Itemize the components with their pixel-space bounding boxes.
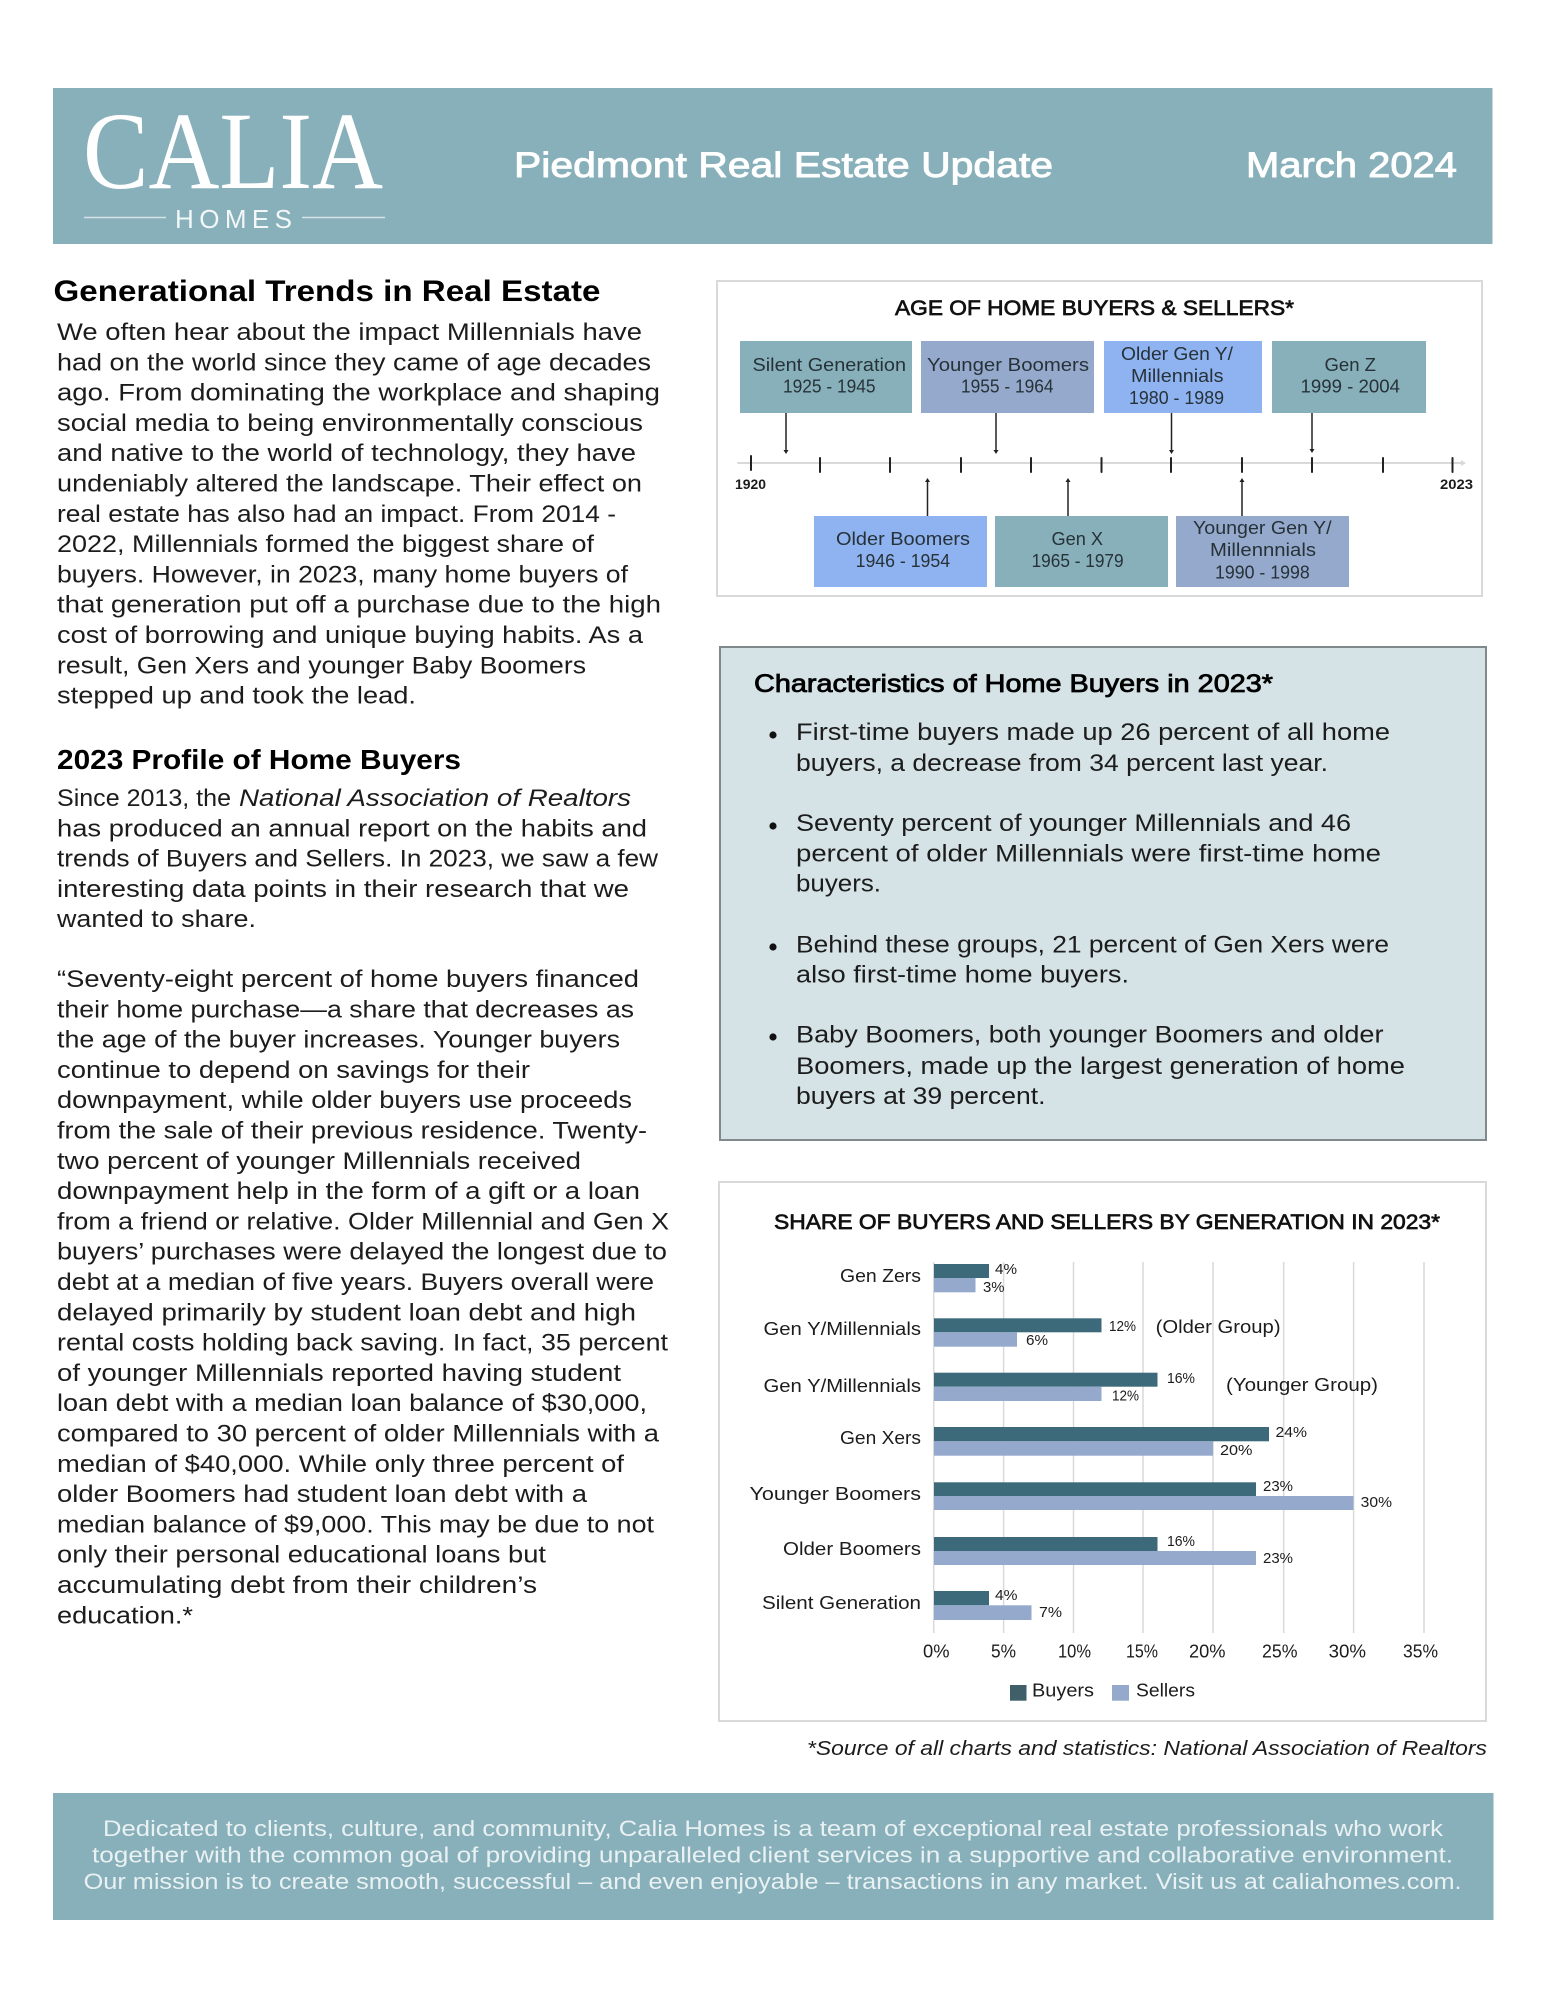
footer mission text — [84, 1816, 1462, 1894]
value labels: 23% — [1263, 1478, 1293, 1495]
x axis labels: 20% — [1189, 1642, 1226, 1662]
buyer bars — [934, 1264, 1269, 1605]
bullet: baby boomers: Baby Boomers, both younger Boomers and older — [796, 1022, 1384, 1049]
timeline title: AGE OF HOME BUYERS & SELLERS* — [895, 297, 1294, 320]
box: Gen Z: Gen Z — [1324, 355, 1376, 375]
logo: Calia Homes: CALIA — [83, 90, 383, 212]
text block: quote: two percent of younger Millennials received — [57, 1148, 581, 1175]
box: Younger Boomers: 1955 - 1964 — [961, 377, 1054, 397]
box: Gen Z: 1999 - 2004 — [1300, 377, 1400, 397]
text block: generational trends: 2022, Millennials formed the biggest share of — [57, 531, 594, 558]
text block: quote: accumulating debt from their children’s — [57, 1572, 537, 1599]
text block: generational trends: We often hear about the impact Millennials have — [57, 319, 642, 346]
text block: generational trends: undeniably altered the landscape. Their effect on — [57, 470, 642, 498]
bullet: first-time buyers: First-time buyers made up 26 percent of all home — [796, 719, 1390, 746]
value labels: 7% — [1039, 1604, 1062, 1621]
text block: quote: only their personal educational loans but — [57, 1542, 546, 1569]
category labels: Silent Generation — [762, 1593, 921, 1613]
box: Older Gen Y / Millennials: Millennials — [1131, 366, 1224, 386]
value labels: 16% — [1167, 1370, 1195, 1387]
bullet: gen xers: Behind these groups, 21 percent of Gen Xers were — [796, 932, 1389, 959]
bullet: millennials — [769, 810, 1381, 898]
category labels: Gen Xers — [840, 1428, 921, 1448]
box: Gen Z — [1272, 341, 1426, 413]
panel: share of buyers and sellers bar chart — [719, 1182, 1486, 1721]
bullet: gen xers — [769, 932, 1389, 989]
box: Younger Boomers — [921, 341, 1094, 413]
text block: quote: from the sale of their previous residence. Twenty- — [57, 1118, 647, 1144]
box: Older Gen Y / Millennials: Older Gen Y/ — [1121, 344, 1233, 364]
text block: quote: rental costs holding back saving. In fact, 35 percent — [57, 1330, 668, 1357]
bullet: baby boomers: buyers at 39 percent. — [796, 1083, 1046, 1110]
text block: profile intro: National Association of Realtors — [239, 785, 631, 812]
date: March 2024 — [1246, 146, 1457, 185]
text block: quote: from a friend or relative. Older Millennial and Gen X — [57, 1208, 669, 1235]
text block: quote: median of $40,000. While only three percent of — [57, 1451, 624, 1478]
footer banner — [53, 1793, 1494, 1920]
box: Gen X: 1965 - 1979 — [1032, 551, 1124, 571]
text block: quote: the age of the buyer increases. Younger buyers — [57, 1027, 620, 1054]
x axis labels: 25% — [1262, 1642, 1298, 1662]
bullet: millennials: buyers. — [796, 871, 881, 898]
box: Younger Gen Y / Millennials: Millennnials — [1210, 540, 1316, 560]
text block: generational trends: stepped up and took the lead. — [57, 683, 416, 710]
text block: profile intro — [56, 785, 658, 933]
box: Silent Generation: 1925 - 1945 — [783, 377, 876, 397]
bullet: millennials: percent of older Millennials were first-time home — [796, 841, 1381, 868]
bullet: baby boomers: Boomers, made up the largest generation of home — [796, 1053, 1405, 1080]
text block: quote: downpayment help in the form of a gift or a loan — [57, 1178, 640, 1205]
box: Younger Boomers: Younger Boomers — [927, 355, 1089, 375]
category labels: Older Boomers — [783, 1539, 921, 1559]
category labels: Gen Y/Millennials — [764, 1376, 921, 1396]
text block: generational trends: buyers. However, in 2023, many home buyers of — [57, 561, 628, 588]
text block: generational trends: had on the world since they came of age decades — [57, 349, 651, 376]
category labels — [750, 1266, 921, 1613]
category labels: Younger Boomers — [750, 1484, 921, 1504]
box: Younger Gen Y / Millennials: Younger Gen Y/ — [1193, 518, 1332, 538]
panel heading: Characteristics of Home Buyers in 2023* — [754, 670, 1273, 698]
text block: profile intro: trends of Buyers and Sellers. In 2023, we saw a few — [57, 846, 658, 873]
logo: Calia Homes: HOMES — [175, 204, 292, 234]
footer mission text: together with the common goal of providing unparalleled client services in a supportive and collaborative environment. — [92, 1842, 1453, 1868]
value labels: 24% — [1276, 1424, 1307, 1441]
gridlines — [934, 1262, 1424, 1633]
header banner — [53, 88, 1492, 244]
axis label: 2023: 2023 — [1440, 476, 1473, 492]
text block: quote: median balance of $9,000. This may be due to not — [57, 1511, 654, 1538]
box: Older Boomers: Older Boomers — [836, 529, 970, 549]
text block: profile intro: interesting data points in their research that we — [57, 876, 629, 903]
x axis labels: 10% — [1058, 1642, 1091, 1662]
box: Gen X: Gen X — [1052, 529, 1103, 549]
value labels: 23% — [1263, 1550, 1293, 1567]
x axis labels: 35% — [1403, 1642, 1438, 1662]
value labels: 4% — [995, 1261, 1017, 1278]
source note: *Source of all charts and statistics: National Association of Realtors — [807, 1737, 1487, 1760]
text block: generational trends — [57, 319, 661, 710]
box: Older Boomers: 1946 - 1954 — [856, 551, 950, 571]
text block: generational trends: that generation put off a purchase due to the high — [57, 592, 661, 619]
x axis labels: 30% — [1329, 1642, 1366, 1662]
box: Silent Generation: Silent Generation — [752, 355, 906, 375]
heading: 2023 Profile: 2023 Profile of Home Buyers — [57, 744, 461, 775]
text block: profile intro: Since 2013, the — [57, 785, 231, 812]
text block: quote: compared to 30 percent of older Millennials with a — [57, 1420, 659, 1448]
value labels — [983, 1261, 1392, 1621]
bullet: baby boomers — [769, 1022, 1405, 1110]
text block: generational trends: social media to being environmentally conscious — [57, 410, 643, 437]
text block: quote — [57, 966, 669, 1629]
text block: quote: continue to depend on savings for their — [57, 1057, 530, 1084]
bullet: gen xers: also first-time home buyers. — [796, 962, 1129, 989]
text block: quote: older Boomers had student loan debt with a — [57, 1481, 587, 1508]
panel: characteristics of home buyers — [720, 647, 1486, 1140]
category labels: Gen Zers — [840, 1266, 921, 1286]
value labels: 12% — [1109, 1318, 1136, 1335]
arrows: generation boxes to timeline — [784, 413, 1314, 516]
newsletter title: Piedmont Real Estate Update — [514, 146, 1053, 185]
bullet: first-time buyers — [769, 719, 1390, 777]
box: Older Boomers — [814, 516, 987, 587]
annotation: younger group: (Younger Group) — [1226, 1375, 1378, 1395]
text block: generational trends: ago. From dominating the workplace and shaping — [57, 380, 660, 407]
axis label: 1920: 1920 — [735, 476, 766, 492]
text block: generational trends: result, Gen Xers and younger Baby Boomers — [57, 652, 586, 679]
text block: quote: buyers’ purchases were delayed the longest due to — [57, 1239, 667, 1266]
text block: profile intro: wanted to share. — [56, 906, 256, 933]
box: Older Gen Y / Millennials — [1104, 341, 1262, 413]
text block: generational trends: real estate has also had an impact. From 2014 - — [57, 501, 616, 528]
x axis labels: 0% — [923, 1642, 950, 1662]
timeline axis — [738, 456, 1466, 472]
text block: quote: their home purchase—a share that decreases as — [57, 996, 634, 1023]
x axis labels: 5% — [991, 1642, 1016, 1662]
value labels: 6% — [1026, 1332, 1048, 1349]
annotation: older group: (Older Group) — [1156, 1317, 1281, 1337]
category labels: Gen Y/Millennials — [764, 1319, 921, 1339]
value labels: 16% — [1167, 1533, 1195, 1550]
x axis labels — [923, 1642, 1438, 1662]
box: Silent Generation — [740, 341, 912, 413]
text block: quote: loan debt with a median loan balance of $30,000, — [57, 1390, 647, 1417]
legend: Buyers — [1032, 1681, 1094, 1701]
value labels: 3% — [983, 1279, 1004, 1296]
text block: profile intro: has produced an annual report on the habits and — [57, 815, 647, 842]
box: Younger Gen Y / Millennials: 1990 - 1998 — [1215, 563, 1310, 583]
value labels: 4% — [995, 1587, 1018, 1604]
chart title: SHARE OF BUYERS AND SELLERS BY GENERATION IN 2023* — [774, 1211, 1440, 1234]
bullet: first-time buyers: buyers, a decrease from 34 percent last year. — [796, 750, 1328, 777]
heading: Generational Trends: Generational Trends in Real Estate — [54, 275, 600, 308]
text block: quote: debt at a median of five years. Buyers overall were — [57, 1269, 654, 1296]
value labels: 30% — [1361, 1494, 1392, 1511]
value labels: 20% — [1220, 1442, 1252, 1459]
footer mission text: Dedicated to clients, culture, and community, Calia Homes is a team of exceptional real estate professionals who work — [103, 1816, 1444, 1841]
panel: age of home buyers and sellers timeline — [717, 281, 1482, 596]
text block: quote: downpayment, while older buyers use proceeds — [57, 1087, 632, 1114]
box: Older Gen Y / Millennials: 1980 - 1989 — [1129, 388, 1224, 408]
text block: quote: of younger Millennials reported having student — [57, 1360, 621, 1387]
box: Gen X — [995, 516, 1168, 587]
footer mission text: Our mission is to create smooth, successful – and even enjoyable – transactions in any market. Visit us at caliahomes.com. — [84, 1869, 1462, 1894]
seller bars — [934, 1278, 1354, 1620]
legend: Sellers — [1136, 1681, 1195, 1701]
text block: generational trends: cost of borrowing and unique buying habits. As a — [57, 622, 643, 649]
text block: quote: “Seventy-eight percent of home buyers financed — [57, 966, 639, 993]
value labels: 12% — [1112, 1388, 1139, 1405]
text block: generational trends: and native to the world of technology, they have — [57, 440, 636, 467]
x axis labels: 15% — [1126, 1642, 1158, 1662]
legend — [1010, 1681, 1195, 1701]
bullet: millennials: Seventy percent of younger Millennials and 46 — [796, 810, 1351, 837]
box: Younger Gen Y / Millennials — [1176, 516, 1349, 587]
text block: quote: education.* — [57, 1602, 194, 1629]
text block: quote: delayed primarily by student loan debt and high — [57, 1299, 636, 1326]
